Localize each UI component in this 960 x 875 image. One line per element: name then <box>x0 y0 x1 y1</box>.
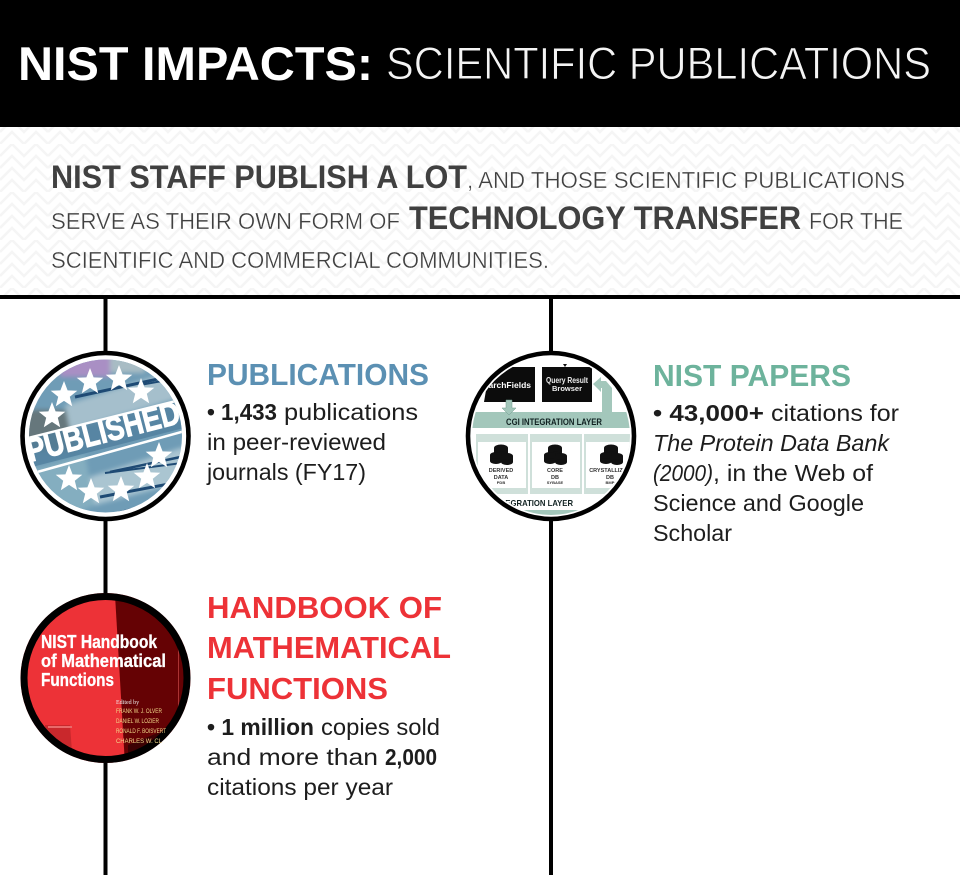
header banner <box>0 0 960 127</box>
icon: data bank diagram: BMP <box>606 480 615 485</box>
icon: published stamp <box>20 350 192 522</box>
cover title: Functions <box>41 670 114 690</box>
body text <box>207 714 440 800</box>
body text: , in the Web of <box>713 460 874 486</box>
intro text: NIST STAFF PUBLISH A LOT <box>51 159 467 195</box>
body text: The Protein Data Bank <box>653 430 891 456</box>
icon: data bank diagram: Query Result <box>546 376 588 385</box>
body text <box>206 399 418 485</box>
body text: publications <box>284 399 418 425</box>
body text: and more than <box>207 744 378 770</box>
cover editors: CHARLES W. CL <box>116 739 163 745</box>
panel: publications <box>206 357 429 485</box>
icon: data bank diagram: SearchFields <box>478 380 531 390</box>
cover editors: Edited by <box>116 700 139 706</box>
icon: handbook cover <box>20 593 190 765</box>
heading: MATHEMATICAL <box>207 630 451 665</box>
body text: copies sold <box>321 714 440 740</box>
body text: (2000) <box>653 460 713 486</box>
icon: data bank diagram: Browser <box>552 384 582 393</box>
icon: data bank diagram <box>466 351 636 522</box>
icon: data bank diagram: DATA <box>494 475 508 481</box>
intro text: TECHNOLOGY TRANSFER <box>409 200 801 236</box>
cover editors: DANIEL W. LOZIER <box>116 719 160 725</box>
body text <box>653 400 899 546</box>
icon: data bank diagram: DB <box>606 475 614 481</box>
body text: citations for <box>771 400 899 426</box>
heading: HANDBOOK OF <box>207 590 442 625</box>
title <box>18 37 931 90</box>
panel: nist papers <box>653 358 899 546</box>
icon: data bank diagram: DB <box>551 475 559 481</box>
title: NIST IMPACTS: <box>18 37 373 90</box>
heading: NIST PAPERS <box>653 358 851 393</box>
cover editors <box>116 700 166 745</box>
cover title <box>41 632 166 690</box>
icon: data bank diagram: CGI INTEGRATION LAYER <box>506 417 602 428</box>
body text: citations per year <box>207 774 393 800</box>
stars <box>39 365 172 503</box>
intro text: , AND THOSE SCIENTIFIC PUBLICATIONS <box>467 167 905 193</box>
cover title: of Mathematical <box>41 651 166 671</box>
intro text: SCIENTIFIC AND COMMERCIAL COMMUNITIES. <box>51 247 549 273</box>
icon: data bank diagram: SYBASE <box>547 480 564 485</box>
body text: Science and Google <box>653 490 864 516</box>
heading: PUBLICATIONS <box>207 357 429 392</box>
icon: data bank diagram: PDB <box>497 480 505 485</box>
icon: data bank diagram: CORE <box>547 468 563 474</box>
body text: 2,000 <box>385 744 437 770</box>
icon: data bank diagram: INTEGRATION LAYER <box>493 498 573 508</box>
heading <box>207 590 451 706</box>
body text: • 43,000+ <box>653 400 764 426</box>
intro panel <box>0 127 960 295</box>
cover editors: RONALD F. BOISVERT <box>116 729 166 735</box>
icon: data bank diagram: DERIVED <box>489 468 513 474</box>
body text: in peer-reviewed <box>207 429 386 455</box>
intro text: SERVE AS THEIR OWN FORM OF <box>51 208 400 234</box>
body text: Scholar <box>653 520 732 546</box>
title: SCIENTIFIC PUBLICATIONS <box>386 38 931 89</box>
intro text: FOR THE <box>809 208 903 234</box>
heading: FUNCTIONS <box>207 671 388 706</box>
icon: data bank diagram: CRYSTALLIZ <box>589 468 623 474</box>
panel: handbook <box>207 590 451 800</box>
body text: • 1,433 <box>207 399 277 425</box>
cover editors: FRANK W. J. OLVER <box>116 709 163 715</box>
body text: journals (FY17) <box>206 459 366 485</box>
cover title: NIST Handbook <box>41 632 158 652</box>
body text: • 1 million <box>207 714 314 740</box>
stamp wording: PUBLISHED <box>22 394 184 469</box>
intro text <box>51 159 905 273</box>
